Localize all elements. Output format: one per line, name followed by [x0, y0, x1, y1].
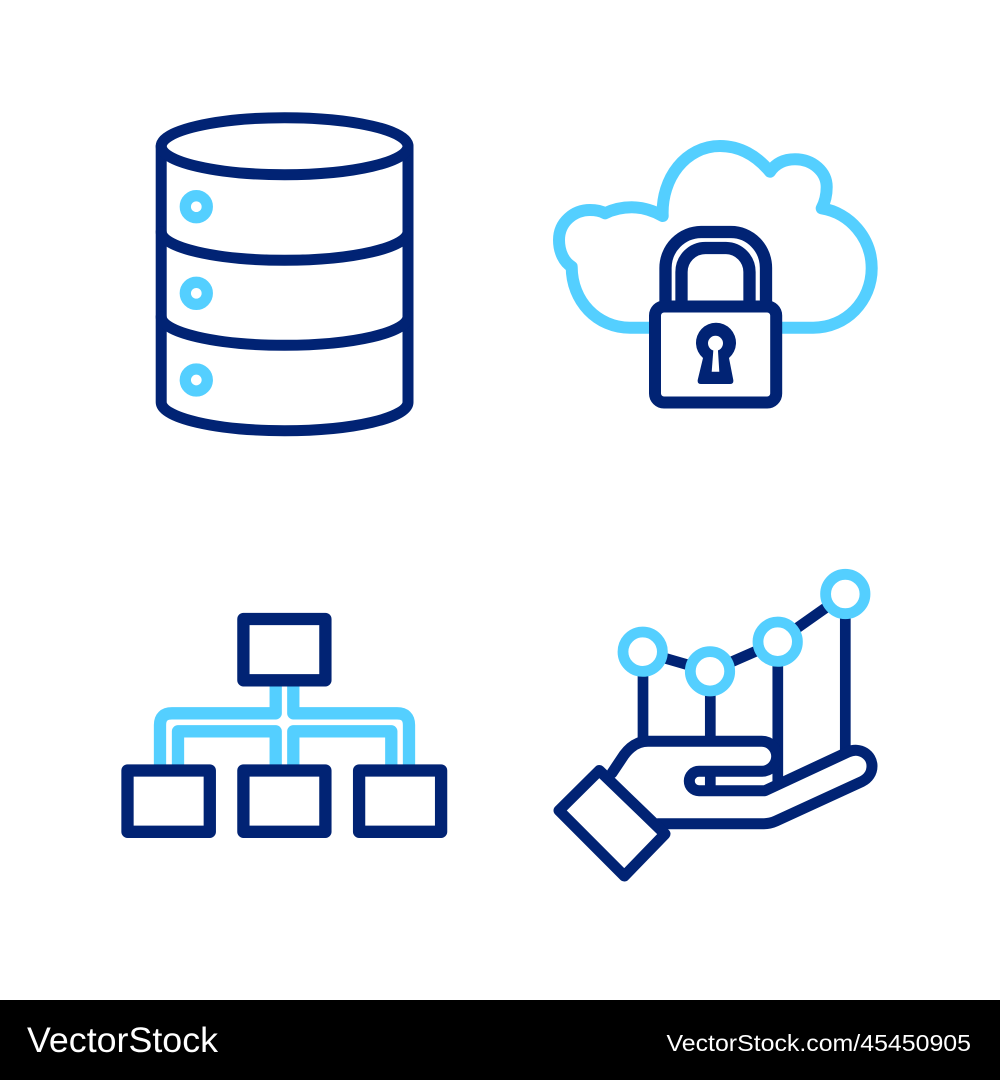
chart trend line	[643, 594, 845, 671]
padlock body	[655, 306, 776, 402]
hand	[612, 741, 872, 824]
database indicator dots	[185, 196, 207, 391]
cylinder body	[161, 118, 408, 431]
footer image id: VectorStock.com/45450905	[666, 1030, 971, 1056]
network boxes	[128, 619, 441, 832]
cloud outline	[559, 146, 872, 328]
connector lines	[160, 684, 409, 768]
icon: hierarchy network	[128, 619, 441, 832]
sleeve cuff	[559, 770, 665, 876]
keyhole	[696, 323, 736, 384]
icon: database cylinder	[161, 118, 408, 431]
icon: hand holding line chart	[559, 574, 872, 876]
padlock shackle	[666, 232, 766, 306]
footer bar	[0, 1000, 1000, 1080]
footer brand: VectorStock	[27, 1021, 219, 1060]
chart data points	[623, 574, 865, 691]
chart stems	[643, 600, 845, 788]
icon: cloud with padlock	[559, 146, 872, 402]
